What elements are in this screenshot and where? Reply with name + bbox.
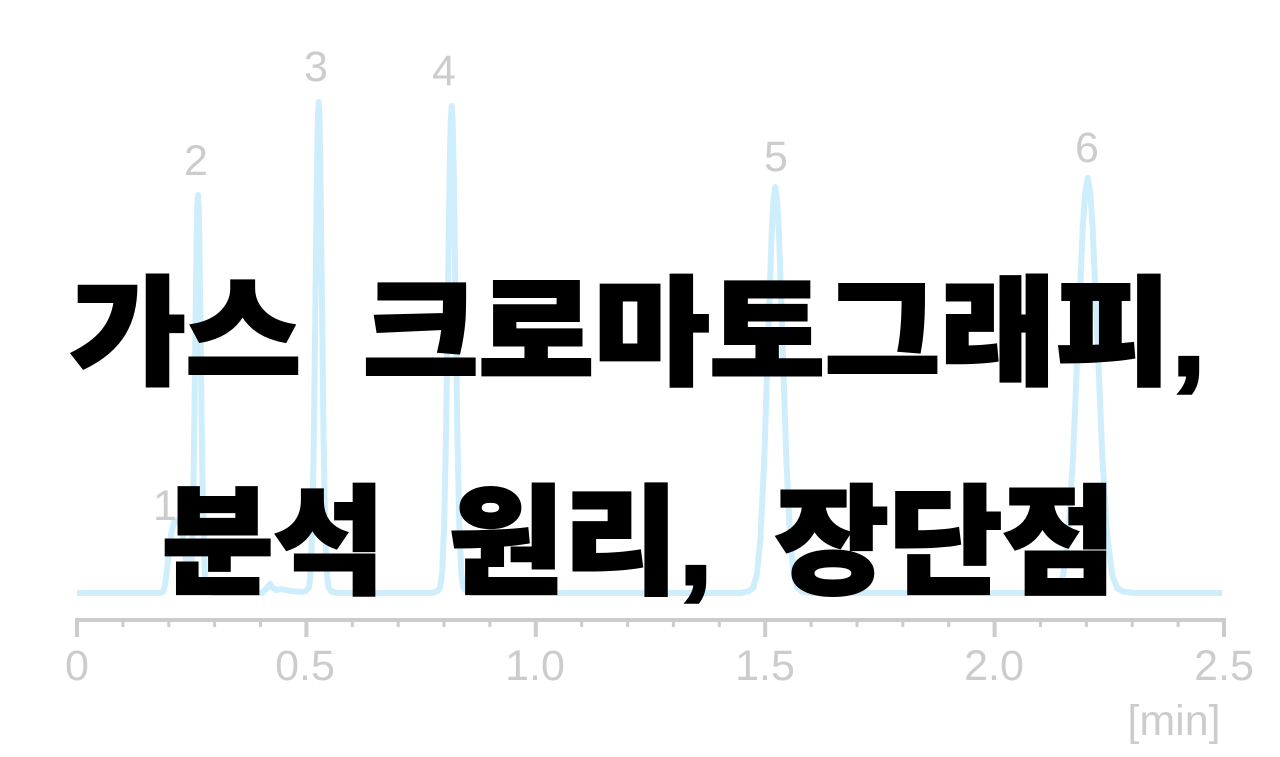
time axis: 0.5 [275,642,335,690]
peak labels: 1 [153,482,177,530]
time axis: 2.5 [1194,642,1254,690]
peak labels [153,43,1099,530]
time axis [65,620,1254,690]
time axis: 1.5 [735,642,795,690]
peak labels: 5 [764,133,788,181]
peak labels: 6 [1075,124,1099,172]
chromatogram trace [77,102,1222,593]
title: 크로마토그래피, [363,269,1206,401]
title: 가스 [70,269,301,401]
title [70,269,1206,610]
time axis: 0 [65,642,89,690]
peak labels: 2 [184,137,208,185]
time axis: 1.0 [505,642,565,690]
peak labels: 4 [432,47,456,95]
title: 장단점 [775,478,1116,610]
axis unit label: [min] [1127,697,1221,745]
time axis: 2.0 [964,642,1024,690]
title: 분석 [162,478,385,610]
peak labels: 3 [304,43,328,91]
title: 원리, [449,478,713,610]
